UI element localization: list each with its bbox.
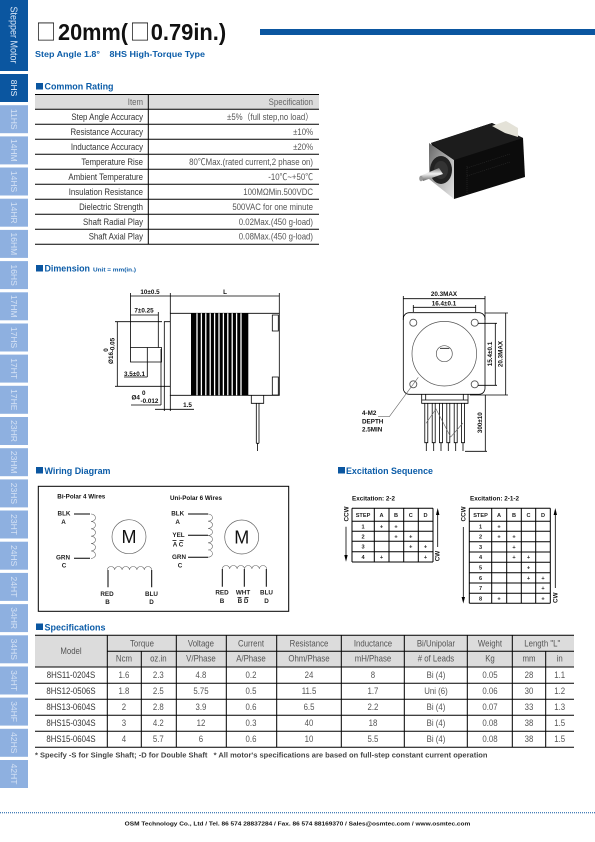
motor photo: [419, 121, 525, 199]
specification rows: 28: [525, 669, 534, 680]
title: □: [36, 15, 56, 47]
table 2-1-2 contents: +: [527, 566, 531, 572]
heading: Dimension: [36, 264, 136, 274]
specification headers: A/Phase: [236, 653, 266, 664]
rating specification column: 0.02Max.(450 g-load): [239, 216, 313, 227]
table 2-2 contents: +: [380, 524, 384, 530]
specification rows: 24: [305, 669, 314, 680]
front dimension labels: 300±10: [477, 412, 484, 433]
table 2-2 contents: +: [394, 534, 398, 540]
front dimension labels: 15.4±0.1: [487, 341, 494, 366]
specification rows: 0.2: [246, 669, 257, 680]
specification rows: 0.6: [246, 733, 257, 744]
subtitle: Step Angle 1.8°: [35, 49, 101, 59]
inactive tab labels: 14HS: [9, 171, 19, 192]
specification rows: 8: [371, 669, 375, 680]
specification headers: Ncm: [116, 653, 132, 664]
unipolar 6 wires: B: [220, 598, 225, 605]
rating specification column: -10℃~+50℃: [268, 171, 314, 182]
front dimension lines: [403, 296, 508, 451]
table 2-1-2 contents: 7: [479, 586, 482, 592]
rating item column: Resistance Accuracy: [70, 126, 144, 137]
specification headers: V/Phase: [186, 653, 216, 664]
rating specification column: [189, 96, 314, 242]
dimension lines: [115, 293, 279, 411]
rating specification column: Specification: [269, 96, 313, 107]
specification rows: 1.2: [554, 685, 565, 696]
specification rows: 5.5: [368, 733, 379, 744]
specification rows: 38: [525, 717, 534, 728]
specification rows: 6.5: [304, 701, 315, 712]
tab: 8HS active: 8HS: [9, 80, 19, 97]
table 2-1-2 contents: +: [527, 576, 531, 582]
specification headers: Resistance: [290, 638, 329, 649]
tab: Stepper Motor: Stepper Motor: [7, 7, 19, 63]
specification rows: Bi (4): [427, 733, 445, 744]
rating specification column: ±5%（full step,no load）: [227, 111, 313, 122]
table 2-1-2 contents: 1: [479, 524, 482, 530]
inactive series tabs: [0, 105, 28, 788]
inactive tab labels: 11HS: [9, 109, 19, 130]
specification rows: 0.6: [246, 701, 257, 712]
inactive tab labels: 23HR: [9, 420, 19, 442]
unipolar 6 wires: B D: [238, 598, 249, 605]
table 2-1-2 contents: 6: [479, 576, 482, 582]
bipolar 4 wires: [56, 495, 158, 606]
table 2-1-2 contents: B: [512, 513, 516, 519]
inactive tab labels: 34HT: [9, 670, 19, 691]
inactive tab labels: 16HS: [9, 264, 19, 286]
specification rows: [46, 669, 565, 744]
table 2-2 contents: B: [394, 513, 398, 519]
bipolar 4 wires: GRN: [56, 555, 70, 562]
flange and bore: [403, 313, 485, 394]
footer contact line: OSM Technology Co., Ltd / Tel. 86 574 28837284 / Fax. 86 574 88169370 / Sales@osmtec.com / www.osmtec.com: [125, 822, 470, 828]
title: 0.79in.): [151, 19, 226, 45]
bipolar 4 wires: B: [105, 599, 110, 606]
table 2-2 contents: +: [409, 534, 413, 540]
cooling fins: [191, 313, 248, 395]
specification headers: Weight: [478, 638, 503, 649]
table 2-1-2 contents: 3: [479, 545, 482, 551]
table 2-1-2 contents: A: [497, 513, 501, 519]
specification rows: 30: [525, 685, 534, 696]
front dimension labels: 20.3MAX: [498, 340, 504, 367]
specification rows: 10: [305, 733, 314, 744]
dimension labels: Ø16: [108, 352, 115, 364]
specification headers: mm: [522, 653, 535, 664]
table 2-2 contents: 4: [361, 555, 365, 561]
unipolar 6 wires: Uni-Polar 6 Wires: [170, 496, 223, 502]
subtitle: [35, 49, 205, 59]
heading: Dimension: Unit = mm(in.): [93, 268, 136, 274]
front dimension labels: 16.4±0.1: [432, 301, 457, 308]
table 2-1-2 contents: +: [497, 524, 501, 530]
bipolar 4 wires: Bi-Polar 4 Wires: [57, 495, 106, 501]
specification rows: 3: [122, 717, 126, 728]
bipolar 4 wires: M: [122, 527, 136, 547]
inactive tab labels: 23HS: [9, 483, 19, 504]
specification rows: Uni (6): [424, 685, 448, 696]
table 2-2 contents: +: [394, 524, 398, 530]
rating specification column: ±10%: [293, 126, 313, 137]
inactive tab labels: 17HT: [9, 358, 19, 379]
table 2-1-2 contents: D: [541, 513, 545, 519]
specification rows: Bi (4): [427, 669, 445, 680]
specification rows: 1.5: [554, 733, 565, 744]
specification rows: 4: [122, 733, 126, 744]
title: [36, 15, 226, 47]
heading: Dimension: Dimension: [44, 264, 90, 274]
table 2-2 contents: C: [409, 513, 413, 519]
heading: Excitation Sequence: Excitation Sequence: [346, 466, 433, 476]
front dimension labels: DEPTH: [362, 418, 384, 425]
specification rows: 1.7: [368, 685, 379, 696]
dimension labels: -0.05: [110, 337, 116, 352]
bipolar 4 wires: RED: [100, 591, 114, 598]
specification rows: 18: [369, 717, 378, 728]
table 2-1-2 contents: [473, 513, 545, 602]
specification headers: Bi/Unipolar: [417, 638, 455, 649]
table 2-1-2 contents: +: [497, 596, 501, 602]
inactive tab labels: 17HE: [9, 389, 19, 411]
subtitle: 8HS High-Torque Type: [110, 49, 205, 59]
inactive tab labels: 17HM: [9, 295, 19, 318]
rating item column: [68, 96, 144, 242]
drawing: motor side view: [103, 289, 279, 451]
dimension labels: [103, 289, 227, 409]
table 2-2 contents: STEP: [356, 513, 371, 519]
specification rows: 0.07: [482, 701, 498, 712]
mounting holes: [410, 319, 478, 388]
inactive tab labels: 34HF: [9, 701, 19, 722]
specification rows: 8HS12-0506S: [46, 685, 96, 696]
table 2-2 contents: +: [424, 555, 428, 561]
specification headers: Current: [238, 638, 265, 649]
bipolar 4 wires: C: [62, 563, 67, 570]
rating item column: Temperature Rise: [81, 156, 143, 167]
front dimension labels: 2.5MIN: [362, 426, 383, 433]
table 2-2 contents: D: [423, 513, 428, 519]
bipolar 4 wires: D: [149, 599, 154, 606]
table 2-2 contents: 2: [361, 534, 365, 540]
rating item column: Shaft Radial Play: [83, 216, 144, 227]
specification rows: 1.6: [119, 669, 130, 680]
specification headers: [60, 638, 563, 664]
inactive tab labels: 24HS: [9, 545, 19, 567]
table 2-1-2 contents: +: [541, 576, 545, 582]
dimension labels: 3.5±0.1: [124, 371, 145, 378]
heading: Wiring Diagram: Wiring Diagram: [44, 466, 110, 476]
table 2-1-2 contents: 4: [479, 555, 483, 561]
specification rows: 8HS15-0604S: [46, 733, 96, 744]
specification rows: 0.5: [246, 685, 257, 696]
tab: Stepper Motor: [0, 0, 28, 71]
table 2-1-2 contents: +: [512, 545, 516, 551]
unipolar 6 wires: [170, 496, 273, 605]
excitation table 2-2: [344, 496, 442, 562]
unipolar 6 wires: YEL: [172, 532, 185, 539]
unipolar 6 wires: GRN: [172, 554, 186, 561]
unipolar 6 wires: BLU: [260, 590, 273, 597]
table 2-1-2 contents: 2: [479, 534, 482, 540]
dimension labels: 7±0.25: [134, 308, 154, 315]
excitation table 2-1-2: [460, 496, 560, 604]
drawing: motor front view: [362, 291, 508, 451]
inactive tab labels: 23HT: [9, 514, 19, 535]
table 2-1-2 contents: STEP: [473, 513, 488, 519]
specification rows: 1.5: [554, 717, 565, 728]
table 2-1-2 contents: 8: [479, 596, 482, 602]
table: specifications: [35, 635, 574, 747]
specification rows: 2.8: [153, 701, 164, 712]
specification headers: Length "L": [524, 638, 560, 649]
specification rows: 0.08: [482, 733, 498, 744]
rating specification column: 100MΩMin.500VDC: [243, 186, 313, 197]
unipolar 6 wires: A C: [173, 541, 184, 548]
front dimension labels: [362, 291, 504, 433]
table 2-1-2 contents: +: [527, 555, 531, 561]
rating specification column: ±20%: [293, 141, 313, 152]
specification rows: 12: [197, 717, 206, 728]
table 2-2 contents: 3: [361, 544, 365, 550]
specification headers: oz.in: [150, 653, 167, 664]
unipolar 6 wires: BLK: [171, 511, 185, 518]
dimension labels: 10±0.5: [140, 289, 160, 296]
title accent bar: [260, 29, 595, 35]
title: □: [130, 15, 150, 47]
specification rows: Bi (4): [427, 717, 445, 728]
heading: Specifications: Specifications: [44, 622, 106, 632]
specification rows: 3.9: [196, 701, 207, 712]
panel: wiring diagram: [38, 486, 289, 611]
specification headers: in: [557, 653, 563, 664]
specification rows: 40: [305, 717, 314, 728]
table 2-1-2 contents: C: [526, 513, 531, 519]
inactive tab labels: 17HS: [9, 327, 19, 348]
unipolar 6 wires: A: [175, 519, 180, 526]
specification rows: 2.3: [153, 669, 164, 680]
specification rows: 8HS13-0604S: [46, 701, 96, 712]
inactive tab labels: 34HS: [9, 639, 19, 660]
specification headers: Inductance: [354, 638, 392, 649]
specification rows: 11.5: [302, 685, 317, 696]
table 2-2 contents: +: [409, 544, 413, 550]
inactive tab labels: [9, 109, 19, 784]
table 2-2 contents: 1: [361, 524, 365, 530]
specification rows: 33: [525, 701, 534, 712]
inactive tab labels: 42HS: [9, 732, 19, 754]
inactive tab labels: 23HM: [9, 451, 19, 474]
specification rows: 0.06: [482, 685, 498, 696]
heading: Common Rating: Common Rating: [44, 82, 114, 92]
inactive tab labels: 34HR: [9, 607, 19, 629]
specification rows: 5.75: [193, 685, 209, 696]
specification headers: Voltage: [188, 638, 214, 649]
dimension labels: Ø4: [132, 394, 140, 402]
rating item column: Insulation Resistance: [69, 186, 143, 197]
specification rows: 8HS15-0304S: [46, 717, 96, 728]
specification headers: # of Leads: [418, 653, 454, 664]
dimension labels: -0.012: [140, 398, 159, 405]
table 2-2 contents: +: [424, 544, 428, 550]
bipolar 4 wires: BLK: [58, 511, 71, 518]
specification rows: 6: [199, 733, 203, 744]
dimension labels: 0: [103, 348, 110, 352]
title: 20mm(: [58, 19, 128, 45]
rating item column: Item: [128, 96, 143, 107]
table 2-1-2 contents: +: [512, 534, 516, 540]
specification rows: 4.8: [196, 669, 207, 680]
specification headers: Torque: [130, 638, 154, 649]
dimension labels: L: [223, 289, 227, 296]
specification rows: 0.08: [482, 717, 498, 728]
rating item column: Inductance Accuracy: [71, 141, 144, 152]
sidebar navigation tabs: [0, 0, 28, 788]
front dimension labels: 4-M2: [362, 410, 377, 417]
unipolar 6 wires: D: [264, 598, 269, 605]
table 2-2 contents: [356, 513, 428, 561]
rating item column: Dielectric Strength: [79, 201, 143, 212]
inactive tab labels: 16HM: [9, 233, 19, 255]
unipolar 6 wires: RED: [215, 590, 229, 597]
rating specification column: 80℃Max.(rated current,2 phase on): [189, 156, 313, 167]
footnote: * Specify -S for Single Shaft; -D for Double Shaft * All motor's specifications are based on full-step constant current operation: [35, 753, 488, 760]
table 2-1-2 contents: 5: [479, 566, 482, 572]
tab: 8HS active: [0, 74, 28, 102]
excitation table 2-1-2: Excitation: 2-1-2: [470, 496, 519, 503]
table 2-1-2 contents: +: [497, 534, 501, 540]
specification rows: 0.05: [482, 669, 498, 680]
specification rows: 1.1: [554, 669, 565, 680]
unipolar 6 wires: WHT: [236, 590, 250, 597]
specification rows: 2.5: [153, 685, 164, 696]
connector and wires: [422, 394, 468, 451]
bipolar 4 wires: BLU: [145, 591, 158, 598]
specification rows: Bi (4): [427, 701, 445, 712]
side view outline: [130, 313, 279, 451]
table 2-2 contents: A: [379, 513, 384, 519]
table 2-2 contents: +: [380, 555, 384, 561]
specification rows: 5.7: [153, 733, 164, 744]
table: common rating: [35, 94, 319, 244]
inactive tab labels: 24HT: [9, 577, 19, 597]
specification rows: 4.2: [153, 717, 164, 728]
CCW arrow: CCW: [460, 506, 468, 522]
front dimension labels: 20.3MAX: [431, 291, 458, 298]
specification headers: Ohm/Phase: [288, 653, 330, 664]
unipolar 6 wires: C: [178, 563, 183, 570]
CW arrow: CW: [434, 551, 442, 561]
dimension labels: 0: [142, 390, 146, 397]
table 2-1-2 contents: +: [541, 586, 545, 592]
inactive tab labels: 14HR: [9, 202, 19, 224]
rating item column: Ambient Temperature: [68, 171, 143, 182]
unipolar 6 wires: M: [234, 528, 249, 548]
rating item column: Shaft Axial Play: [89, 231, 144, 242]
dimension labels: 1.5: [183, 402, 192, 409]
specification rows: 1.8: [119, 685, 130, 696]
CW arrow: CW: [552, 592, 560, 603]
specification rows: 8HS11-0204S: [47, 669, 96, 680]
specification headers: Kg: [485, 653, 495, 664]
inactive tab labels: 14HM: [9, 139, 19, 162]
specification rows: 1.3: [554, 701, 565, 712]
inactive tab labels: 42HT: [9, 764, 19, 784]
bipolar 4 wires: A: [61, 519, 66, 526]
excitation table 2-2: Excitation: 2-2: [352, 496, 395, 503]
specification headers: mH/Phase: [355, 653, 392, 664]
rating specification column: 500VAC for one minute: [232, 201, 313, 212]
CCW arrow: CCW: [344, 506, 350, 522]
specification rows: 38: [525, 733, 534, 744]
specification rows: 2.2: [368, 701, 379, 712]
table 2-1-2 contents: +: [512, 555, 516, 561]
specification rows: 0.3: [246, 717, 257, 728]
specification headers: Model: [60, 645, 82, 656]
specification rows: 2: [122, 701, 126, 712]
table 2-1-2 contents: +: [541, 596, 545, 602]
rating specification column: 0.08Max.(450 g-load): [239, 231, 313, 242]
rating item column: Step Angle Accuracy: [71, 111, 144, 122]
